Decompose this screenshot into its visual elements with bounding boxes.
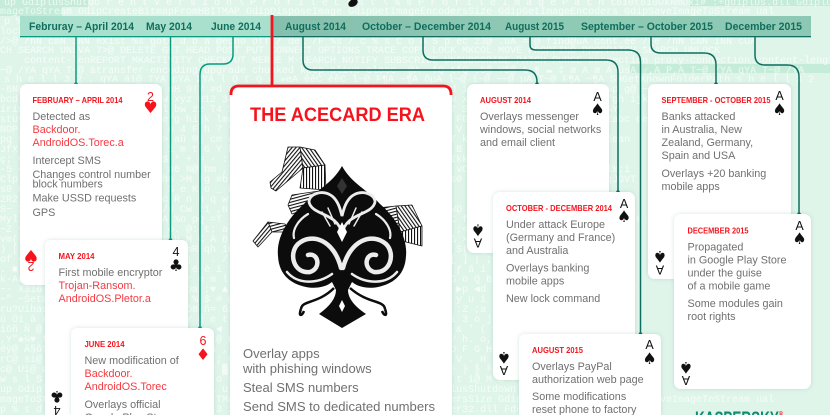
card index: 4 of clubs: ♣ bbox=[169, 256, 183, 275]
card body text bbox=[84, 355, 180, 411]
card index: 2 of hearts: 2 bbox=[27, 259, 34, 273]
panel: card October – December 2014 bbox=[493, 192, 635, 380]
background: code texture: w s l S O F T W A R E \ M i c r o s o f t \ W i n d o w s N T \ C u r r e n t i@ M u r bbox=[0, 374, 516, 386]
title fragment bbox=[347, 0, 359, 9]
red connector and top border bbox=[231, 15, 451, 95]
card index: 6 of diamonds: 6 bbox=[200, 334, 207, 348]
background: code texture: JfX y ÿ^B »^B z P v % w a 0 1 m t G Y h S 6 J q u d l r I C e H L x N k T o B f A W g C'cd- bbox=[0, 144, 546, 156]
card index: ace of spades: A bbox=[681, 373, 690, 387]
card body text bbox=[506, 219, 615, 305]
panel: card June 2014 bbox=[71, 328, 214, 415]
card body text bbox=[688, 242, 787, 323]
background: code texture: -6N@ 7!3oH lR%k wQ +p pG cW uH 9!Y #d o0 7e kA =u F8 5m tH @ e Qe 0Zl 8 S &d iN nC fr Wj i@ 1 T U M s%p g@ ~@ aA br bbox=[0, 84, 690, 96]
card date heading: MAY 2014 bbox=[58, 251, 95, 261]
card index: ace of spades: A bbox=[645, 338, 654, 352]
background: code texture: mageToStream GdipCreateBitmapFromHBITMAP GdipDisposeImage GdipGetImageEncodersSize GdipGetImageEncoders GdipSaveImageToStream ual bbox=[0, 6, 774, 18]
card index: ace of spades bbox=[679, 219, 807, 387]
card body text: AndroidOS.Torec.a bbox=[32, 137, 124, 149]
background: code texture: Myl (Y:387 X2 Ã0 lG ,j r5 +A %o pQ =T ~K Zw Y1 Pn Bv Ed ^u @x !b ó0 6i ts gC fa Om U] e[ h} q{ c) 8( zSVes0 bbox=[0, 213, 642, 226]
feature list: Send SMS to dedicated numbers bbox=[243, 399, 436, 414]
card date heading: JUNE 2014 bbox=[84, 339, 125, 349]
card index: ace of spades: ♠ bbox=[772, 100, 787, 119]
card body text: and email client bbox=[480, 137, 555, 149]
card body text: Overlays banking bbox=[506, 262, 589, 274]
card body text: windows, social networks bbox=[479, 124, 602, 136]
card date heading: AUGUST 2014 bbox=[480, 95, 531, 105]
card body text bbox=[662, 111, 766, 193]
background: code texture: ~- X316 â,e% ü2 ,7 (Y )L a: hg oa ;♥ ▲l ♠u ♣b ♦1 •O ◘t ○M ◙r ♂G ♀F ♪v ♫e ☼s ►p ◄d ↕i ‼k ¶c §f !! ↔q ▲ ∙[2R bbox=[0, 284, 636, 296]
background: code texture: S~ X91◄NS]H♦≈J i@ fH K0 tB /u Cw :1 ,N .Y %k ^d q! r# m$ bA oe gI jL s> x< wD yz pF h1 ;n M= -~ U* ~«♦@ bbox=[0, 204, 618, 216]
background: code texture: vm( rdfrvE ! E a v o U n s t H M C A B q d y z k x r Z T p j b i L e 1 Q < ∆ × ¤ ‡ lAc@ , bbox=[0, 234, 534, 246]
background: code texture: û Öi ā ä o J f W h 7 R x ¥ % D Y é e t E s a l k C U P n M b G g y v w q r i 3 o j ►♦@ .♠♠t bbox=[0, 313, 546, 326]
panel: card December 2015 bbox=[674, 214, 811, 389]
card body text: block numbers bbox=[32, 178, 103, 190]
background: code texture: mageToStream GdipCreateBitmapFromHBITMAP GdipDisposeImage GdipGetImageEncodersSize GdipGetImageEncoders GdipSaveImageToStream ual bbox=[0, 394, 774, 406]
background: code texture: up Gdipl u s S t a r t u p G d i p l u s S h u t d o w n iplus Startup GdiplusShutdown bbox=[0, 384, 516, 396]
heading: THE ACECARD ERA bbox=[250, 105, 425, 126]
card body text: New lock command bbox=[506, 293, 600, 305]
card index: ace of spades: ♠ bbox=[471, 220, 485, 240]
card body text: Overlays messenger bbox=[480, 111, 579, 123]
card body text: Trojan-Ransom. bbox=[58, 280, 136, 292]
card index: 6 of diamonds bbox=[196, 334, 210, 364]
card body text bbox=[58, 267, 163, 305]
background: code texture: ~@ /YA qYA T~@ &transfer-encoding upgrade chunked keep-alive close ~@A -fQ tfQ .5@ Y$@ t ¶ ▬ ‡ æ A æ A úsA ♂,A P,A T~@ /YA qYA T~@ /YA bbox=[0, 65, 804, 77]
background: code texture: -5 ♦H¥ \H♦^¥ g0 ~1 p0 eR 1S a6 N@ bm ,T x8 W_ 7A cU !f %D ^& +Z =Y -q oJ rL vC sn hK d1 :F g; m tE I l%;i bbox=[0, 164, 630, 176]
card body text: AndroidOS.Torec bbox=[84, 381, 167, 393]
panel: card August 2015 bbox=[519, 334, 661, 415]
card body text: Spain and USA bbox=[662, 150, 736, 162]
card body text: AndroidOS.Pletor.a bbox=[58, 293, 151, 305]
background: code texture: irin iÃ oO ;Z ©® æ@ ñ! ij kl bw zz T4 %B 9- q1 tT v/ _q e\ rU pL #y IX yh v7 3s Dn HB aT (~ q¥ ã1 ◄B ¼Y bbox=[0, 103, 618, 116]
background: code texture: NOP f t i E r o a n d e b s u 4 F h 7 Y v C M q K U t d e o H s T x G J w l V B z 1 R .@ ◄,I ,tB bbox=[0, 124, 576, 136]
date label: Februray – April 2014 bbox=[29, 21, 135, 33]
horse bbox=[253, 147, 422, 247]
panel: card September – October 2015 bbox=[648, 84, 791, 279]
date label: December 2015 bbox=[725, 21, 802, 33]
card body text: Some modules gain bbox=[688, 298, 783, 310]
card index: 2 of hearts bbox=[24, 90, 158, 273]
card body text: Under attack Europe bbox=[506, 219, 605, 231]
centre and top diamonds bbox=[337, 222, 347, 242]
date label: August 2014 bbox=[285, 21, 347, 33]
date label: May 2014 bbox=[146, 21, 193, 33]
swirl ornaments bbox=[287, 193, 397, 282]
background: code texture: lock p r o f i l e c o o k i e s t e m p w i n d o w s s y s t e m a p p d a t a bbox=[0, 26, 480, 38]
card body text bbox=[532, 361, 644, 415]
card index: 6 of diamonds: ♦ bbox=[196, 345, 210, 364]
card body text: (Germany and France) bbox=[506, 232, 615, 244]
timeline bar bbox=[20, 16, 811, 37]
card index: ace of spades: ♠ bbox=[642, 349, 657, 368]
card date heading: SEPTEMBER - OCTOBER 2015 bbox=[662, 95, 771, 105]
card index: 4 of clubs bbox=[50, 245, 183, 415]
date label: October – December 2014 bbox=[362, 21, 492, 33]
card date heading: OCTOBER - DECEMBER 2014 bbox=[506, 203, 612, 213]
background: code texture: iöñ Ñ @ ↓ ♦ • ♣ ♠ ◘ ○ ◙ ♂ ♀ ♪ ♫ ☼ ► ◄ ↕ ‼ ¶ § ▬ ↨ ↑ ↓ → ← ∟ ↔ ▲ ▼ ! " # $ % & ' ( ) * rU8 bbox=[0, 323, 534, 336]
card body text: GPS bbox=[32, 207, 55, 219]
card index: 4 of clubs: 4 bbox=[173, 245, 180, 259]
card body text: mobile apps bbox=[506, 276, 565, 288]
card body text: Backdoor. bbox=[84, 368, 133, 380]
card body text: Overlays PayPal bbox=[532, 361, 612, 373]
card index: ace of spades bbox=[471, 90, 605, 250]
background: code texture: k-AûU%é X3164 ÄnNC iNi ; k u D r e m l p V c y O a s t W q f N L h z i x b G o Q B J H K ÂiCi%+ bbox=[0, 272, 570, 286]
background: code texture: content-lenREPORT MKACTIVITY CHECKOUT MERGE M-SEARCH NOTIFY SUBSCRIBE UNSUBSCRIBE PATCH PURGE connection proxy-connection content-length bbox=[24, 55, 830, 67]
panel: card May 2014 bbox=[45, 240, 188, 415]
date label: August 2015 bbox=[505, 21, 564, 33]
background: code texture: ~Z ySves0Ceq ê@ ]? k> s< n, o. @: t; a~ c` 2! #$ %^ &* () -+ =[ {] }\ |" ': ;< >, .? / © ¤ £ ¥ ¦ § ¨ bbox=[0, 223, 600, 236]
background: code texture: rC@ si@ U a b q g 9 1 v Q P L e I Y ; 0 j s 3 f t z c n u K O x d r , m G E V . H R w T d%6Ë bbox=[0, 353, 552, 366]
background: code texture: pq stuvwxyz01 HyB ^%çy tA >> aû ®j cm è@ ôb dL mK tz qe h( x9 W! 3N s= uD fT kQ yG pE iO cB nV aJ gH ôean bbox=[0, 134, 630, 146]
background: code texture: ç; ♥♥♦%. < | _ ~ ^ & # @ ! $ * + = - : ; ' " , . / ? > < ] [ } { ) ( % \ t Ikk bbox=[0, 154, 468, 166]
card body text: in Australia, New bbox=[662, 124, 742, 136]
card index: ace of spades bbox=[497, 197, 631, 377]
card date heading: AUGUST 2015 bbox=[532, 345, 583, 355]
card body text bbox=[32, 111, 151, 219]
panel: the Acecard era bbox=[230, 15, 452, 415]
background: code texture: bcd efg hij klm nop qrst uvw xyz 012 345 678 9ab cde fgh ijk lmn opq rst uvw xyz 012 345 678 9ab cde fgh ijklmno bbox=[0, 94, 672, 106]
card index: ace of spades: A bbox=[795, 219, 804, 233]
background: code texture: ru?Uibacj mI O* nf gD pz ♥v ♠3 ô8 ñ= 6x Ñw C0 é1 FQ (R )S ~T ¡U *V +W -X /Y :Z ;a <b >c ?d @e [f ]g 0 ;Ee bbox=[0, 303, 630, 316]
card index: ace of spades: ♠ bbox=[617, 207, 631, 226]
card index: ace of spades: ♠ bbox=[590, 100, 605, 119]
background: code texture: éÿ@ Ä§ôT ʼ ~ w e n t b y u m o v r a , . ; s z i f x p h q l g d j k c A S D F G H J Z X C ↕♥B bbox=[0, 343, 564, 356]
panel: card August 2014 bbox=[467, 84, 609, 253]
background: code texture: 2R2 ~¶~~ > p l < y u b t o c R n h q w G v Z f r J D a S k + = % ^%% bbox=[0, 194, 408, 206]
background: code texture: c@ Ui@ ø é ï º ® ¤ ¡ ¿ ½ ¼ ½ « » ░ ▒ ▓ │ ┤ ╡ ╢ ╖ ╕ ╣ ║ ╗ ╝ ╜ ╛ ┐ └ ┴ ┬ ├ ─ ┼ ╞ ╟ ╚ ╔ ╩ e°hp bbox=[0, 363, 546, 376]
card date heading: DECEMBER 2015 bbox=[688, 226, 749, 236]
card body text: Make USSD requests bbox=[32, 192, 137, 204]
card body text: Detected as bbox=[32, 111, 91, 123]
card index: 2 of hearts: 2 bbox=[147, 90, 154, 104]
background: code texture: ~" ~ŠetØ· u l - = + _ ) ( * & ^ % $ # @ ! ~ ` 1 2 3 4 5 6 7 8 9 0 q w e r t y u i o p ,lìC bbox=[0, 292, 540, 306]
card body text: Changes control number bbox=[32, 169, 151, 181]
card body text: of a mobile game bbox=[688, 280, 770, 292]
background: code texture: ) [ ~GFFU c0 tM UU +x %c aW f7 mR qh 1O iB eP !k oC vN &A J* ^v G$ y# @n zL S( _Q =K ~I -D `E i♦♦3@ o bbox=[0, 243, 606, 256]
card index: ace of spades: ♠ bbox=[497, 348, 511, 367]
card body text: under the guise bbox=[688, 268, 762, 280]
card index: ace of spades: A bbox=[499, 363, 508, 377]
card body text bbox=[479, 111, 602, 149]
spade bbox=[278, 166, 406, 328]
card body text: Banks attacked bbox=[662, 111, 735, 123]
card index: ace of spades: ♠ bbox=[653, 247, 667, 266]
card body text: and Australia bbox=[506, 245, 568, 257]
feature list: with phishing windows bbox=[242, 361, 372, 376]
card index: 4 of clubs: ♣ bbox=[50, 387, 64, 406]
background: code texture: . ■ bf y= PPy ù ÿ Ã â ä å à ç ê ë è ï î ì Ä Å É æ Æ ô ö ò û ù ÿ Ö Ü ¢ £ ¥ ₧ ƒ á í ó ú ñ |d bbox=[0, 262, 540, 276]
feature list: Steal SMS numbers bbox=[243, 380, 359, 395]
card body text: Overlays official bbox=[84, 399, 161, 411]
background: code texture: of ♦♦T@@ 7 3 g h - d 9 * u r Q j , . / ? ~ > < ! @ # $ % ^ & ( ) _ + = { } [ ] | ; : ' " Mr bbox=[0, 254, 546, 266]
date label: June 2014 bbox=[211, 21, 262, 33]
date label: September – October 2015 bbox=[581, 21, 713, 33]
card index: ace of spades: A bbox=[620, 197, 629, 211]
card body text: Propagated bbox=[688, 242, 743, 254]
card index: ace of spades: A bbox=[655, 262, 664, 276]
card index: ace of spades bbox=[653, 89, 787, 276]
background: code texture: stuv yz01 23456 789+ /abc defg hijk lmno pqrs tuvw xyz0 1234 5678 9+/A BCDE FGHI JKLM NOPQ RSTU VWXY Zabc defg hijkl bbox=[0, 114, 696, 126]
card index: ace of spades: ♠ bbox=[792, 229, 807, 248]
connector lines bbox=[74, 37, 801, 336]
card index: 2 of hearts: ♥ bbox=[24, 246, 38, 265]
panel: card February – April 2014 bbox=[20, 84, 162, 285]
card body text: in Google Play Store bbox=[688, 254, 787, 266]
card body text: New modification of bbox=[84, 355, 180, 367]
background: code texture: Clp 3,w??-3p)! μ@ ^d eK w~ h6 >M !g #b (5 )u qC jN fi zH tO ;Y pD a= c| v' s0 n" r. G/ l? 1XJ@ ÿ &k \qJGVT bbox=[0, 174, 636, 186]
card body text: Backdoor. bbox=[32, 124, 81, 136]
side curls bbox=[300, 288, 386, 315]
card index: ace of spades: A bbox=[473, 236, 482, 250]
background: code texture: p % s d i l l 3 2 . d l l s h e l l 3 2 . d l l G d i p l u s . d l l k e r n e l 3 2 . d l l u s e r 3 2 . d l l bbox=[4, 16, 682, 28]
card body text: First mobile encryptor bbox=[58, 267, 163, 279]
card body text: authorization web page bbox=[532, 374, 644, 386]
card index: ace of spades: A bbox=[593, 90, 602, 104]
card body text: Overlays +20 banking bbox=[662, 168, 766, 180]
illustration: spade and origami horse bbox=[253, 147, 422, 328]
background: code texture: ,Y"♠¼♥ fDs "@ \a ,L j> ~C 2y Cd ^f i@ K8 t6 ¼S +w -u _e =k Fa !B nq ml Pv s? h. o, X/ I; gO :c T' QR sT·ö bbox=[0, 334, 630, 346]
card index: ace of spades bbox=[642, 338, 657, 368]
card index: 2 of hearts: ♥ bbox=[143, 98, 158, 117]
card body text: root rights bbox=[688, 311, 736, 323]
feature list bbox=[242, 346, 436, 414]
background: code texture: s0 H aou , j μ %i U r B V d S e K o _ P b y m W q E J H x t g ¿7$ bbox=[0, 184, 390, 196]
background: code texture: CH SEARCH UNLVA 7>@ DELETE GET HEAD POST PUT CONNECT OPTIONS TRACE COPY LOCK MKCOL MOVE PROPFIND PROPPATCH SEARCH UNLOCK bbox=[0, 45, 720, 57]
card body text: Zealand, Germany, bbox=[662, 137, 753, 149]
background: code texture: s h e l l 3 2 . qYA äi@ TYA cYA 2YA l Q t Q » »eA êéC éêC l~@ F¶A ~¶A õµA l~@ i~@ ~~@ µA T~@ F¶A ~¶A SHGetKnownFolderPath s h e l l 3 2 bbox=[4, 74, 814, 86]
card index: ace of spades: ♠ bbox=[679, 358, 693, 377]
card date heading: FEBRUARY – APRIL 2014 bbox=[32, 95, 123, 105]
background: code texture: />@ /nN cmN iNN exist %s goto d b a @echo off / del /F %s / c % s C o m S p ec 23@ .uA = @ find@uA cont.ee /Fe /nN cmN iNN cUA bbox=[0, 36, 756, 48]
card body text: Some modifications bbox=[532, 391, 627, 403]
card index: ace of spades: A bbox=[775, 89, 784, 103]
feature list: Overlay apps bbox=[243, 346, 320, 361]
card body text: mobile apps bbox=[662, 181, 720, 193]
card body text: Intercept SMS bbox=[32, 155, 101, 167]
